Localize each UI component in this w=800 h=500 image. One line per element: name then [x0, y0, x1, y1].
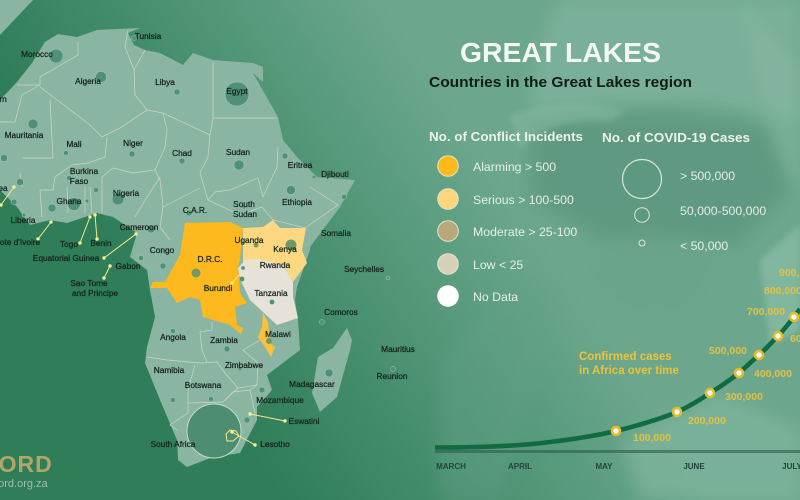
region: Tanzania, Rwanda, Burundi: [238, 259, 298, 325]
country labels: Egypt: [226, 86, 248, 96]
value labels: [633, 267, 800, 444]
land: Madagascar: [312, 328, 352, 412]
country labels: Mauritania: [5, 130, 44, 140]
legend heading: covid: No. of COVID-19 Cases: [602, 131, 750, 145]
country labels: Togo: [60, 239, 78, 249]
chart caption: Confirmed cases: [579, 351, 672, 363]
country labels: Mauritius: [381, 344, 415, 354]
country labels: South: [233, 199, 255, 209]
country labels: Ethiopia: [282, 197, 312, 207]
moderate swatch: [438, 221, 458, 241]
country labels: Sudan: [233, 209, 257, 219]
country labels: Tanzania: [254, 288, 288, 298]
region: Uganda and Kenya: [243, 220, 307, 282]
small bubble: [639, 240, 645, 246]
country labels: Faso: [70, 176, 89, 186]
value labels: 400,000: [754, 368, 792, 380]
country labels: Eswatini: [289, 416, 320, 426]
country labels: Somalia: [321, 228, 351, 238]
curve markers: [612, 313, 798, 435]
country labels: Chad: [172, 148, 192, 158]
country labels: Ghana: [57, 196, 82, 206]
country labels: Reunion: [377, 371, 408, 381]
country labels: Sudan: [226, 147, 250, 157]
value labels: 100,000: [633, 432, 671, 444]
background photo: masked health worker: [440, 0, 800, 500]
country labels: ote d'Ivoire: [0, 237, 41, 247]
country labels: Namibia: [154, 365, 185, 375]
month labels: MARCH: [436, 462, 466, 471]
large label: > 500,000: [680, 169, 735, 183]
country labels: Eritrea: [288, 160, 313, 170]
small label: < 50,000: [680, 239, 728, 253]
month labels: JUNE: [683, 462, 705, 471]
land: Africa mainland: [0, 28, 355, 467]
low swatch: [438, 254, 458, 274]
country labels: and Principe: [72, 288, 118, 298]
month labels: [436, 462, 800, 471]
country labels: Tunisia: [135, 31, 162, 41]
growth curve: [435, 309, 800, 448]
country labels: Comoros: [324, 307, 358, 317]
legend: conflict incidents: [429, 130, 583, 307]
country labels: Liberia: [11, 215, 36, 225]
legend heading: conflict: No. of Conflict Incidents: [429, 130, 583, 144]
country labels: Burundi: [204, 283, 232, 293]
subtitle: Countries in the Great Lakes region: [429, 74, 692, 91]
country labels: Botswana: [185, 380, 222, 390]
country labels: Zambia: [210, 335, 238, 345]
value labels: 500,000: [709, 345, 747, 357]
country labels: Congo: [150, 245, 175, 255]
country labels: D.R.C.: [198, 254, 222, 264]
country labels: Uganda: [234, 235, 264, 245]
country labels: Niger: [123, 138, 143, 148]
serious label: Serious > 100-500: [473, 193, 574, 207]
country labels: Angola: [160, 332, 186, 342]
month labels: APRIL: [508, 462, 532, 471]
no data swatch: [437, 285, 459, 307]
country labels: Algeria: [75, 76, 101, 86]
country labels: Mali: [66, 139, 82, 149]
country labels: Rwanda: [260, 260, 291, 270]
month labels: MAY: [595, 462, 613, 471]
serious swatch: [438, 189, 458, 209]
country borders: [0, 30, 338, 430]
large bubble: [622, 160, 662, 198]
country labels: Mozambique: [256, 395, 304, 405]
country labels: Sao Tome: [70, 278, 108, 288]
moderate label: Moderate > 25-100: [473, 225, 577, 239]
country labels: Benin: [90, 238, 112, 248]
Lesotho outline: [226, 430, 239, 441]
medium bubble: [635, 208, 649, 222]
country labels: Libya: [155, 77, 175, 87]
title: GREAT LAKES: [460, 37, 661, 68]
no data label: No Data: [473, 290, 518, 304]
case bubbles: [0, 36, 396, 423]
country labels: Kenya: [273, 244, 297, 254]
country labels: South Africa: [151, 439, 196, 449]
country labels: Burkina: [70, 166, 98, 176]
country labels: Nigeria: [113, 188, 140, 198]
South Africa highlight circle: [187, 404, 241, 458]
alarming swatch: [438, 156, 458, 176]
leader lines: [0, 185, 287, 447]
country labels: Djibouti: [321, 169, 349, 179]
logo: [0, 451, 53, 490]
land: Spain corner: [0, 0, 33, 35]
medium label: 50,000-500,000: [680, 204, 766, 218]
legend: COVID-19 cases: [602, 131, 766, 253]
country labels: Gabon: [116, 261, 141, 271]
region: Malawi: [258, 313, 275, 357]
country labels: Seychelles: [344, 264, 384, 274]
country labels: Equatorial Guinea: [33, 253, 100, 263]
time axis: [435, 450, 800, 453]
country labels: Morocco: [21, 49, 53, 59]
country labels: Malawi: [265, 329, 291, 339]
region: D.R.C.: [150, 222, 247, 334]
alarming label: Alarming > 500: [473, 160, 556, 174]
value labels: 700,000: [747, 306, 785, 318]
country labels: Cameroon: [120, 222, 159, 232]
country labels: Madagascar: [289, 379, 335, 389]
country labels: Zimbabwe: [225, 360, 264, 370]
chart caption: in Africa over time: [579, 365, 679, 377]
country labels: C.A.R.: [183, 205, 207, 215]
map of Africa: [0, 0, 415, 467]
value labels: 200,000: [688, 415, 726, 427]
country labels: [0, 31, 415, 449]
low label: Low < 25: [473, 258, 523, 272]
line chart: confirmed cases over time: [435, 267, 800, 471]
country labels: Lesotho: [260, 439, 290, 449]
value labels: 300,000: [725, 391, 763, 403]
